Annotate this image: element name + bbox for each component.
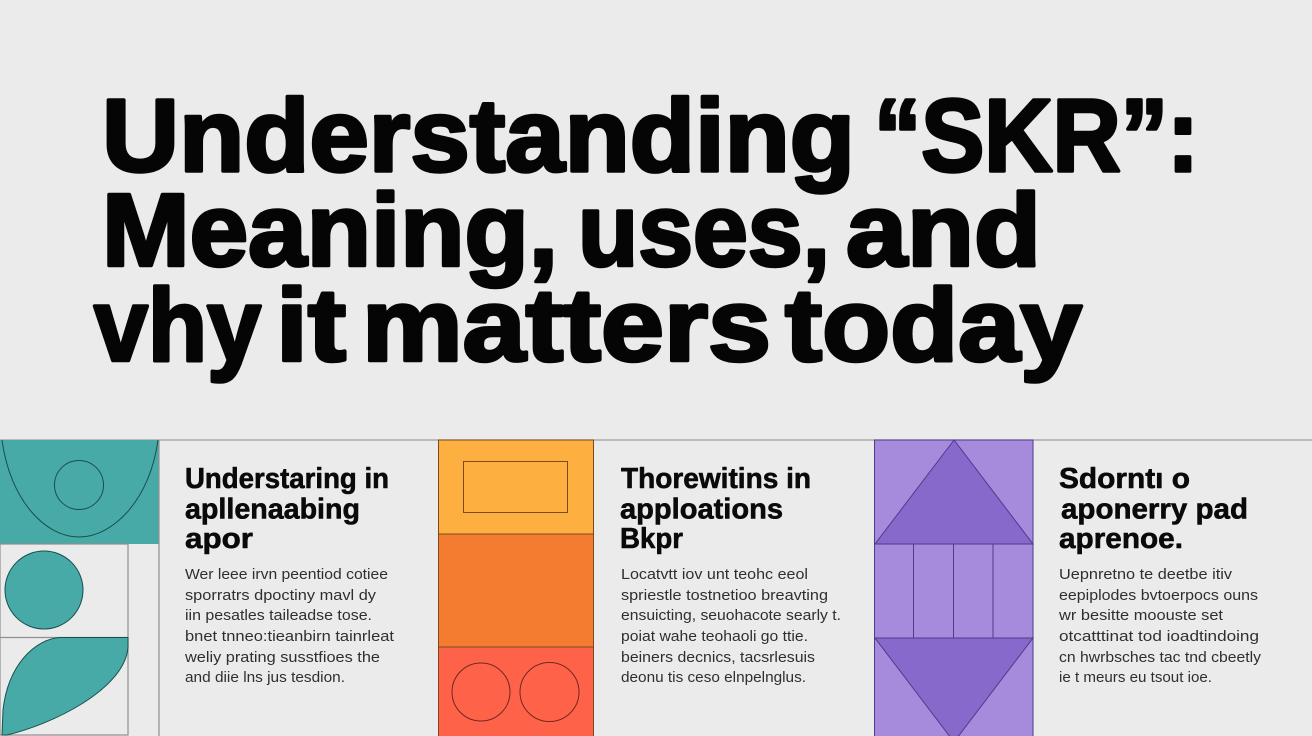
icon: orange geometric artwork xyxy=(438,440,594,736)
title: uses, xyxy=(578,172,830,288)
heading: orange column: Thorewitins in xyxy=(621,463,811,495)
heading: purple column: aprenoe. xyxy=(1059,523,1183,555)
text block: purple column: ie t meurs eu tsout ioe. xyxy=(1059,669,1212,686)
heading: orange column: Bkpr xyxy=(620,523,683,555)
text block: purple column: wr besitte moouste set xyxy=(1058,607,1224,624)
heading: teal column: apor xyxy=(185,523,253,555)
heading: teal column: apllenaabing xyxy=(185,494,360,526)
text block: teal column: sporratrs dpoctiny mavl dy xyxy=(185,587,377,604)
heading: purple column: aponerry pad xyxy=(1061,494,1248,526)
panel: teal column xyxy=(0,440,395,736)
title: it xyxy=(276,268,346,382)
title: and xyxy=(846,172,1041,288)
panel: orange column xyxy=(438,440,841,736)
heading: purple column: Sdorntı o xyxy=(1059,463,1190,495)
heading: orange column: apploations xyxy=(620,494,783,526)
text block: orange column: ensuicting, seuohacote searly t. xyxy=(621,607,841,624)
title: matters xyxy=(362,268,771,382)
text block: purple column: otcatttinat tod ioadtindoing xyxy=(1059,628,1259,645)
text block: teal column xyxy=(184,566,395,686)
text block: teal column: weliy prating susstfioes the xyxy=(184,649,380,666)
heading: orange column xyxy=(620,463,811,555)
text block: teal column: and diie lns jus tesdion. xyxy=(185,669,345,686)
title: Meaning, xyxy=(102,172,558,288)
text block: orange column: Locatvtt iov unt teohc eeol xyxy=(621,566,808,583)
text block: teal column: iin pesatles taileadse tose. xyxy=(185,607,372,624)
text block: purple column: Uepnretno te deetbe itiv xyxy=(1059,566,1233,583)
icon: purple geometric artwork xyxy=(874,440,1033,736)
icon: teal geometric artwork xyxy=(0,440,159,736)
text block: purple column xyxy=(1058,566,1262,686)
heading: purple column xyxy=(1059,463,1248,555)
heading: teal column xyxy=(185,463,389,555)
text block: orange column: spriestle tostnetioo breavting xyxy=(621,587,828,604)
title xyxy=(94,78,1199,382)
text block: teal column: bnet tnneo:tieanbirn tainrleat xyxy=(185,628,395,645)
text block: purple column: cn hwrbsches tac tnd cbeetly xyxy=(1059,649,1262,666)
title: today xyxy=(785,268,1082,382)
panel: purple column xyxy=(874,440,1262,736)
title: : xyxy=(1167,78,1199,193)
title: “SKR” xyxy=(874,78,1168,193)
text block: orange column: deonu tis ceso elnpelnglus. xyxy=(621,669,806,686)
text block: orange column: poiat wahe teohaoli go ttie. xyxy=(621,628,808,645)
title: vhy xyxy=(94,268,261,382)
text block: orange column: beiners decnics, tacsrlesuis xyxy=(621,649,815,666)
text block: teal column: Wer leee irvn peentiod cotiee xyxy=(185,566,388,583)
title: Understanding xyxy=(102,78,855,193)
text block: purple column: eepiplodes bvtoerpocs ouns xyxy=(1059,587,1258,604)
text block: orange column xyxy=(621,566,841,686)
heading: teal column: Understaring in xyxy=(185,463,389,495)
